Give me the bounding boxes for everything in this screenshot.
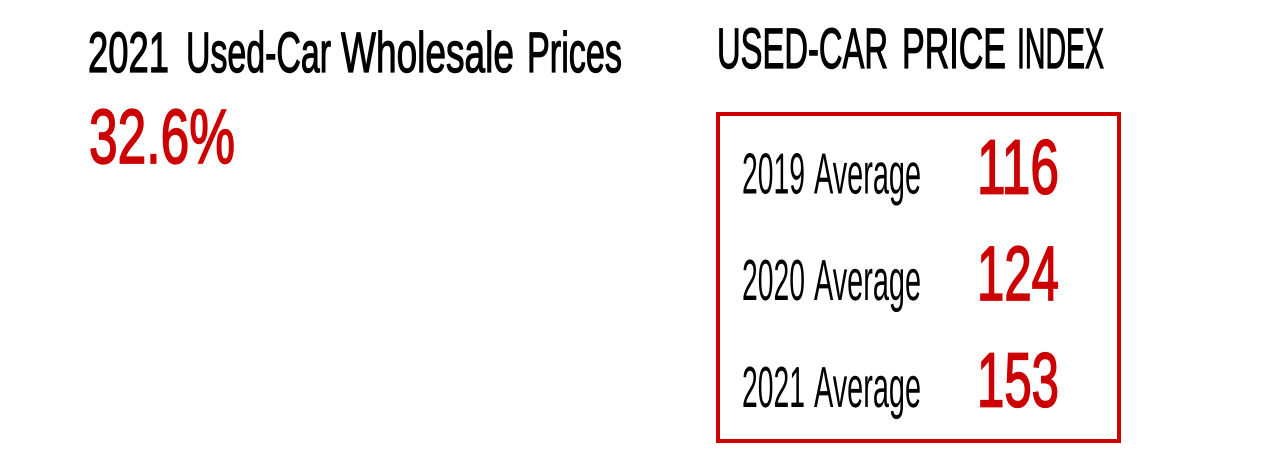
- heading: wholesale prices: Prices: [527, 21, 622, 85]
- heading: wholesale prices: Wholesale: [341, 21, 514, 85]
- row value: 2019 index: 116: [977, 124, 1059, 210]
- heading: used-car price index: USED-CAR: [717, 17, 888, 81]
- row label: 2020 average: 2020: [742, 248, 805, 313]
- stat: wholesale price change: 32.6%: [89, 94, 235, 180]
- row label: 2019 average: 2019: [742, 142, 805, 206]
- row label: 2021 average: 2021: [742, 355, 805, 420]
- panel border: [718, 114, 1119, 441]
- panel: price index table: Average: [814, 355, 921, 420]
- panel: price index table: Average: [814, 142, 921, 206]
- panel: price index table: [718, 114, 1119, 441]
- row value: 2021 index: 153: [977, 338, 1059, 424]
- heading: wholesale prices: 2021: [88, 21, 169, 85]
- heading: wholesale prices: Used-Car: [186, 21, 331, 85]
- panel: price index table: Average: [814, 248, 921, 313]
- heading: wholesale prices: [88, 21, 622, 85]
- row value: 2020 index: 124: [977, 231, 1059, 317]
- heading: used-car price index: PRICE: [902, 17, 1006, 81]
- text: INDEX: [1017, 17, 1104, 81]
